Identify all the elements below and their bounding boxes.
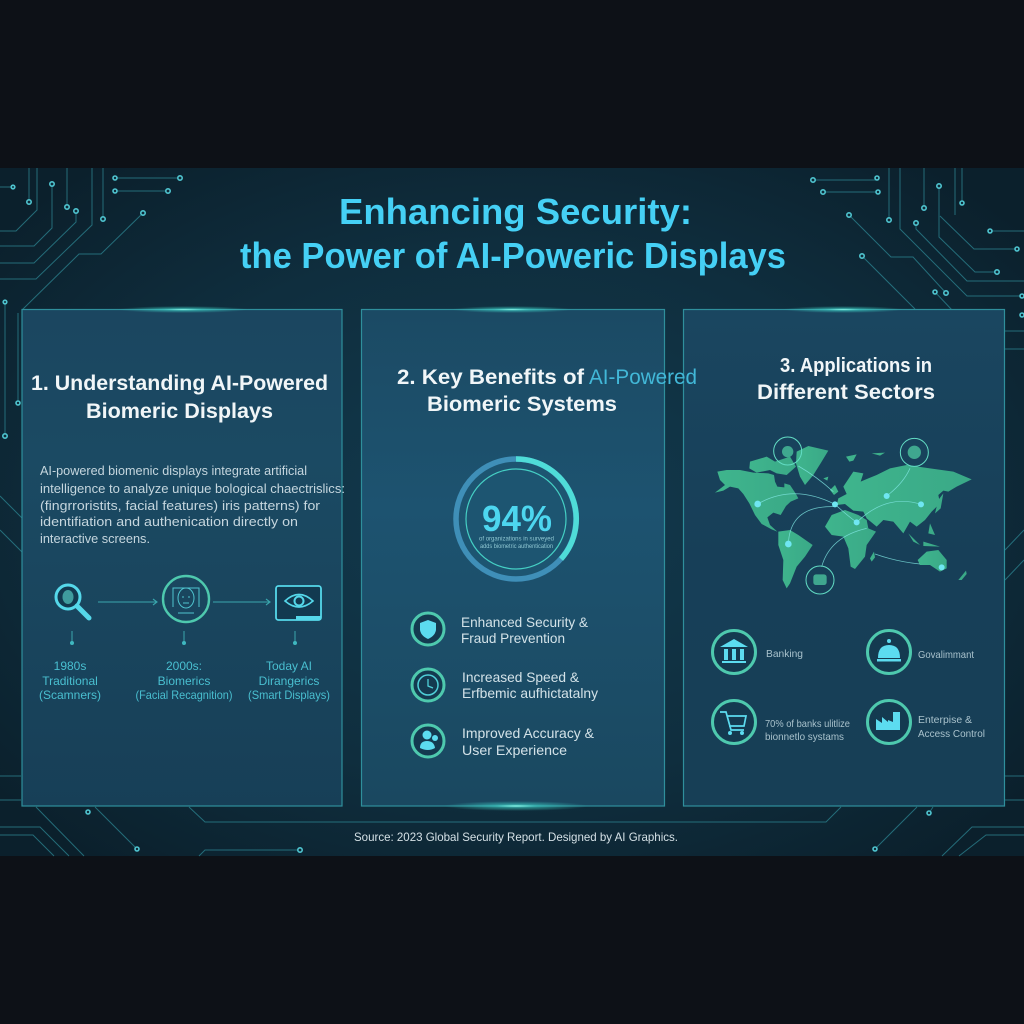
benefit 3: user experience: Improved Accuracy & bbox=[462, 725, 595, 741]
benefit 3: user experience: User Experience bbox=[462, 742, 567, 758]
sector: banking: Banking bbox=[766, 648, 803, 660]
sector: enterprise: Enterpise & bbox=[918, 714, 972, 726]
timeline label: 2000s: (Facial Recagnition) bbox=[136, 688, 232, 702]
panel 1 body text: (fingrroristits, facial features) iris patterns) for bbox=[40, 498, 321, 513]
panel 2 heading highlight overlapping panel 3: AI-Powered bbox=[589, 366, 697, 389]
timeline label: 2000s: 2000s: bbox=[166, 659, 202, 673]
panel 3 heading: 3. Applications in bbox=[780, 355, 932, 377]
gauge: 94%: 94% bbox=[482, 498, 552, 539]
circuit traces: bottom bbox=[0, 776, 1024, 856]
panel 2 bottom glow bbox=[444, 801, 588, 811]
map callout glyphs bbox=[782, 446, 921, 585]
connection arcs bbox=[758, 466, 921, 567]
panel 1 body text bbox=[40, 463, 345, 546]
timeline label: today: Dirangerics bbox=[259, 674, 319, 688]
benefit 2: speed bbox=[412, 669, 598, 701]
sector: enterprise: Access Control bbox=[918, 728, 985, 740]
panel 3: applications bbox=[684, 306, 1004, 806]
icon: facial recognition bbox=[163, 576, 209, 622]
panel 1: understanding bbox=[22, 306, 345, 806]
timeline label: today bbox=[248, 659, 330, 702]
benefit 1: security: Fraud Prevention bbox=[461, 630, 565, 646]
title bbox=[240, 191, 786, 276]
gauge: 94%: of organizations in surveyed bbox=[479, 536, 554, 542]
timeline dots bbox=[70, 641, 297, 645]
sector: government: Govalimmant bbox=[918, 649, 974, 661]
timeline label: 1980s: Traditional bbox=[42, 674, 98, 688]
panel 1 body text: intelligence to analyze unique bological chaectrislics: bbox=[40, 481, 345, 496]
gauge: 94% bbox=[456, 459, 576, 579]
gauge: 94%: adds biometric authentication bbox=[480, 544, 553, 550]
sector: banking bbox=[712, 630, 803, 674]
panel 2: benefits bbox=[362, 306, 664, 811]
timeline label: 2000s bbox=[136, 659, 232, 702]
map nodes bbox=[754, 493, 945, 570]
panel 1 heading bbox=[31, 372, 328, 423]
continents bbox=[715, 446, 972, 588]
benefit 3: user experience bbox=[412, 725, 595, 758]
timeline down arrows bbox=[72, 631, 295, 642]
panel 1 heading: 1. Understanding AI-Powered bbox=[31, 372, 328, 395]
panel 1 body text: identifiation and authenication directly on bbox=[40, 514, 298, 529]
circuit traces: top right bbox=[811, 168, 1024, 580]
panel 1 heading: Biomeric Displays bbox=[86, 400, 273, 423]
panel 1 top glow bbox=[118, 306, 248, 313]
title: Enhancing Security: bbox=[339, 191, 692, 232]
panel 2 heading bbox=[397, 366, 617, 416]
map callout icons bbox=[774, 437, 928, 594]
timeline label: today: Today AI bbox=[266, 659, 312, 673]
background band bbox=[0, 168, 1024, 856]
sector: retail statistic: bionnetlo systams bbox=[765, 731, 844, 743]
timeline label: 1980s bbox=[39, 659, 101, 702]
panel 2 heading: 2. Key Benefits of bbox=[397, 366, 585, 389]
sector: enterprise bbox=[868, 700, 985, 744]
panel 2 top glow bbox=[452, 306, 572, 313]
title: the Power of AI-Poweric Displays bbox=[240, 235, 786, 276]
panel 3 heading: Different Sectors bbox=[757, 381, 935, 404]
timeline label: 2000s: Biomerics bbox=[158, 674, 210, 688]
icon: eye on smart display bbox=[276, 586, 321, 620]
panel 1 body text: interactive screens. bbox=[40, 531, 150, 546]
panel 2 heading: Biomeric Systems bbox=[427, 393, 617, 416]
sector: government bbox=[868, 630, 974, 674]
icon: fingerprint magnifier bbox=[56, 585, 89, 618]
arrow: 2000s to today bbox=[213, 599, 270, 605]
timeline label: today: (Smart Displays) bbox=[248, 688, 330, 702]
panel 3 heading bbox=[757, 355, 935, 404]
sector: retail statistic: 70% of banks ulitlize bbox=[765, 718, 850, 730]
circuit traces: top left bbox=[0, 168, 182, 552]
sector: retail statistic bbox=[712, 700, 850, 744]
timeline label: 1980s: (Scamners) bbox=[39, 688, 101, 702]
panel 1 body text: AI-powered biomenic displays integrate artificial bbox=[40, 463, 307, 478]
benefit 2: speed: Increased Speed & bbox=[462, 669, 580, 685]
benefit 2: speed: Erfbemic aufhictatalny bbox=[462, 685, 598, 701]
arrow: 1980s to 2000s bbox=[98, 599, 157, 605]
world map bbox=[715, 437, 972, 594]
benefit 1: security bbox=[412, 613, 589, 646]
benefit 1: security: Enhanced Security & bbox=[461, 614, 589, 630]
timeline label: 1980s: 1980s bbox=[54, 659, 86, 673]
panel 3 top glow bbox=[783, 306, 903, 313]
source footer: Source: 2023 Global Security Report. Designed by AI Graphics. bbox=[354, 830, 678, 844]
